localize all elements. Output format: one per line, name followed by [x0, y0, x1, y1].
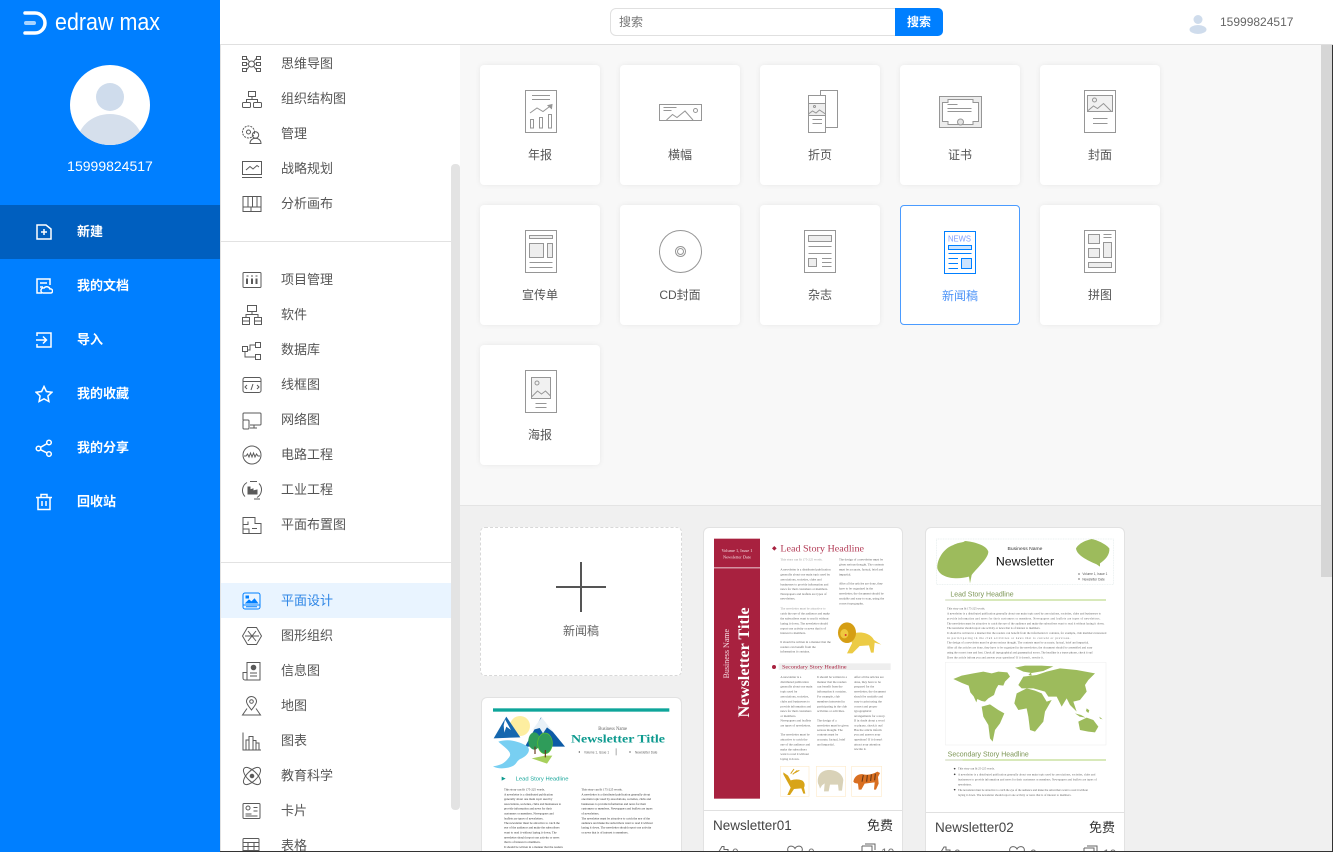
lead story: businesses to provide information and news for their: [581, 802, 646, 806]
search input: [610, 8, 900, 36]
lead story: Newspapers and leaflets are types of: [780, 592, 827, 596]
lead story: The design of a newsletter must be given serious thought. The contents must be accurate, factual, brief and impartial.: [947, 641, 1089, 645]
secondary story: members interested in: [817, 699, 845, 703]
category: 平面设计 (selected): 平面设计: [281, 593, 333, 608]
lead story: correct typography.: [839, 601, 864, 605]
lion illustration: [838, 622, 881, 653]
lead story: After all the articles are done, they: [839, 582, 883, 587]
category: 电路工程: 电路工程: [281, 447, 333, 462]
category: 组织结构图: [242, 91, 346, 108]
masthead: Newsletter Date: [1082, 577, 1105, 581]
secondary story: attractive to catch the: [780, 738, 808, 742]
category: 教育科学: [242, 766, 333, 786]
lead story: A newsletter is a distributed publication generally about one main topic used by associations, societies, clubs and businesses to: [947, 611, 1102, 615]
secondary story: For example, club: [817, 695, 840, 700]
secondary story: Has the article inform: [854, 728, 882, 732]
lead story: This story can fit 175-225 words.: [947, 606, 985, 610]
lead story: generally about one main topic used by: [780, 573, 830, 577]
type card: 新闻稿 (selected): NEWS: [948, 234, 971, 244]
category: 电路工程: [242, 446, 333, 464]
lead story: It should be written in a manner that the readers: [504, 845, 564, 849]
nav item: 我的收藏: [35, 385, 129, 403]
category: 网络图: 网络图: [281, 412, 320, 427]
world map: [945, 662, 1106, 745]
type card: 折页: [760, 65, 880, 185]
secondary story: The design of a: [817, 719, 837, 723]
type card: 证书: [900, 65, 1020, 185]
lead story: This story can fit 175-225 words.: [504, 788, 545, 792]
teal banner line: [493, 708, 669, 712]
secondary story: attract your attention: [854, 742, 881, 746]
template type panel: [460, 45, 1333, 505]
secondary story: manner that the readers: [817, 680, 847, 684]
secondary story: newsletter must be given: [817, 723, 849, 727]
secondary story: The newsletter must be: [780, 733, 810, 737]
secondary story: associations, societies,: [780, 695, 809, 700]
secondary story: The newsletter must be attractive to catch the eye of the audience and make the subscribers want to read it without: [958, 788, 1088, 792]
type card: 折页: 折页: [808, 148, 832, 162]
category: 软件: 软件: [281, 307, 307, 322]
nav item: 我的文档: 我的文档: [77, 278, 129, 293]
masthead: Business Name: [1008, 546, 1043, 552]
lead story: A newsletter is a distributed publication generally about: [581, 792, 650, 796]
secondary story: easy to print using the: [854, 699, 882, 703]
template card: Newsletter03: [481, 697, 682, 852]
nav item: 我的分享: [36, 440, 129, 457]
masthead: [936, 539, 1114, 584]
lead story: [502, 777, 653, 849]
newsletter03 thumbnail: [493, 708, 670, 849]
lead story: using the correct tone and font. Check all typographical and grammatical errors. The headline is a teaser phrase, check it out!: [947, 651, 1093, 655]
red title band: Newsletter Date: [723, 555, 751, 560]
category: 表格: [242, 838, 307, 852]
category: 工业工程: [242, 481, 333, 500]
secondary story: make the subscribers: [780, 747, 808, 751]
category: 教育科学: 教育科学: [281, 768, 333, 783]
category: 战略规划: 战略规划: [281, 161, 333, 176]
window bottom edge: [220, 851, 1333, 852]
lead story: The newsletter must be attractive to catch the eye of the: [581, 816, 651, 820]
newsletter02 price: 免费: [1089, 820, 1115, 835]
type card: CD封面: [620, 205, 740, 325]
nav item: 回收站: [36, 494, 116, 510]
category: 信息图: 信息图: [281, 663, 320, 678]
category: 战略规划: [242, 161, 333, 178]
secondary story: done, they have to be: [854, 680, 882, 685]
type card: 拼图: 拼图: [1088, 288, 1112, 302]
lead story: businesses to provide information and: [780, 582, 829, 586]
secondary story: activities or activities.: [817, 709, 845, 713]
type card: 封面: 封面: [1088, 148, 1112, 162]
secondary story: laying it down.: [780, 757, 800, 761]
landscape illustration: [493, 716, 565, 768]
secondary story: This story can fit 25-225 words.: [958, 767, 995, 771]
type card: 封面: [1040, 65, 1160, 185]
lead story: eye of the audience and make the subscribers: [504, 826, 560, 830]
red title band: Volume 1, Issue 1: [722, 548, 752, 554]
lead story: news for their customers or members.: [780, 587, 828, 591]
masthead: Volume 1, Issue 1: [584, 750, 609, 754]
secondary story: you and answer your: [854, 733, 881, 737]
secondary story: businesses to provide information and news for their customers or members. Newspapers and leaflets are types of: [958, 778, 1097, 782]
secondary story: can benefit from the: [817, 685, 843, 689]
lead story: The newsletter must be attractive to: [780, 606, 826, 610]
secondary story: newsletter; the document: [854, 690, 886, 694]
secondary story: [945, 752, 1106, 797]
newsletter01 name: Newsletter01: [713, 818, 792, 833]
type card: 宣传单: 宣传单: [522, 288, 558, 302]
secondary story: questions? If it doesn't: [854, 738, 882, 742]
secondary story: topic used by: [780, 690, 798, 694]
masthead: Volume 1, Issue 1: [1082, 572, 1108, 576]
user avatar: [70, 65, 150, 145]
type card: 杂志: [760, 205, 880, 325]
lead story: A newsletter is a distributed publication: [504, 792, 553, 796]
blank card label: 新闻稿: [563, 624, 599, 638]
top header bar: [220, 0, 1333, 45]
category: 思维导图: 思维导图: [281, 56, 333, 71]
secondary story: or phrase, check it out!: [854, 723, 883, 728]
red title band: [714, 539, 760, 799]
lead story: catch the eye of the audience and make: [780, 611, 830, 615]
masthead: [571, 727, 665, 755]
lead story: of newsletters.: [581, 811, 600, 815]
type card: 新闻稿 (selected): 新闻稿: [942, 289, 978, 303]
category: 线框图: [242, 377, 320, 393]
secondary story: information it contains.: [817, 690, 847, 694]
secondary story: If in doubt about a word: [854, 719, 885, 723]
lead story: report one activity or news that is of: [780, 626, 827, 630]
lead story: information it contains.: [780, 650, 810, 654]
secondary story: Secondary Story Headline: [948, 752, 1029, 759]
secondary story: should be readable and: [854, 695, 883, 699]
category: 网络图: [242, 412, 320, 430]
type card: 海报: [480, 345, 600, 465]
search input: 搜索: [619, 15, 643, 29]
category: 地图: [242, 696, 307, 716]
secondary story: or members.: [780, 714, 796, 718]
secondary story: laying it down. The newsletter should report one activity or news that is of interest to members.: [958, 793, 1072, 797]
category: 地图: 地图: [281, 698, 307, 713]
lead story: After all the articles are done, they have to be organized in the newsletter; the document should be assembled and easy: [947, 646, 1093, 650]
lead story: [772, 544, 885, 654]
lead story: [945, 591, 1107, 659]
secondary story: arrangements for a story.: [854, 714, 886, 718]
nav item: 新建 (active): [0, 205, 220, 259]
lead story: associations, societies, clubs and businesses to: [504, 802, 562, 807]
secondary story: contents must be: [817, 733, 839, 737]
category: 图表: [242, 732, 307, 750]
lead story: leaflets are types of newsletters.: [504, 816, 544, 820]
lead story: want to read it without laying it down. The: [504, 831, 557, 835]
type card: 证书: 证书: [948, 148, 972, 162]
category: 分析画布: [242, 196, 333, 212]
page scrollbar: [1321, 45, 1333, 577]
secondary story: It should be written in a: [817, 675, 848, 679]
lead story: the subscribers want to read it without: [780, 616, 829, 620]
secondary story: are types of newsletters.: [780, 723, 811, 727]
template list panel: [460, 505, 1333, 852]
lead story: interest to members.: [780, 631, 806, 635]
secondary story: distributed publication: [780, 680, 809, 684]
user icon: [1190, 15, 1206, 34]
lead story: It should be written in a manner that the readers can benefit from the information it contains, for example, club members interested: [947, 631, 1107, 635]
newsletter01 stats: [718, 844, 894, 852]
category: 线框图: 线框图: [281, 377, 320, 392]
lead story: have to be organized in the: [839, 586, 874, 590]
lead story: The newsletter must be attractive to catch the eye of the audience and make the subscribers want to read it without laying it down.: [947, 621, 1105, 625]
lead story: in participating in the club activities or news that is current or previous.: [947, 636, 1071, 640]
category panel: [220, 45, 460, 852]
newsletter02 name: Newsletter02: [935, 820, 1014, 835]
lead story: Lead Story Headline: [780, 544, 864, 555]
secondary story: generally about one main: [780, 685, 813, 689]
type card: 年报: 年报: [528, 148, 552, 162]
secondary story: clubs and businesses to: [780, 699, 810, 703]
newsletter01 price: 免费: [867, 818, 893, 833]
lead story: It should be written in a manner that the: [780, 640, 831, 644]
secondary story: participating in the club: [817, 704, 847, 708]
category: 项目管理: 项目管理: [281, 272, 333, 287]
plus icon: [556, 562, 606, 612]
type card: 海报: 海报: [528, 428, 552, 442]
lead story: newsletter; the document should be: [839, 591, 884, 595]
lead story: readable and easy to scan, using the: [839, 596, 885, 601]
category: 数据库: [242, 342, 320, 360]
lead story: newsletter should report one activity or news: [504, 835, 560, 839]
lead story: customers or members. Newspapers and leaflets are types: [581, 807, 653, 811]
nav item: 我的收藏: 我的收藏: [77, 386, 129, 401]
lead story: associations, societies, clubs and: [780, 577, 822, 582]
lead story: generally about one main topic used by: [504, 797, 553, 801]
secondary story: A newsletter is a distributed publication generally about one main topic used by associations, societies, clubs and: [958, 773, 1096, 777]
secondary story: After all the articles are: [854, 675, 884, 679]
category: 卡片: 卡片: [281, 803, 307, 818]
red title band: Newsletter Title: [736, 607, 753, 717]
category: 图形组织: 图形组织: [281, 628, 333, 643]
lead story: provide information and news for their customers or members. Newspapers and leaflets are types of newsletters.: [947, 616, 1101, 620]
lead story: Does the article inform you and answer your questions? If it doesn't, rewrite it.: [947, 655, 1044, 659]
category: 管理: [242, 126, 307, 144]
category: 软件: [242, 305, 307, 325]
category: 信息图: [242, 662, 320, 680]
category: 图表: 图表: [281, 733, 307, 748]
secondary story: want to read it without: [780, 752, 809, 756]
secondary story: correct and proper: [854, 704, 878, 708]
nav item: 我的分享: 我的分享: [77, 440, 129, 455]
animal pictures: [780, 766, 882, 796]
lead story: Lead Story Headline: [516, 777, 568, 783]
category: 思维导图: [242, 56, 333, 72]
category: 卡片: [242, 803, 307, 819]
nav item: 回收站: 回收站: [77, 494, 116, 509]
nav item: 导入: 导入: [77, 332, 103, 347]
category: 数据库: 数据库: [281, 342, 320, 357]
secondary story: rewrite it.: [854, 747, 866, 751]
lead story: provide information and news for their: [504, 807, 552, 811]
lead story: This story can fit 175-225 words.: [780, 558, 823, 562]
lead story: laying it down. The newsletter should: [780, 621, 828, 625]
category: 分析画布: 分析画布: [281, 196, 333, 211]
lead story: or news that is of interest to members.: [581, 831, 629, 835]
new blank template card: [480, 527, 682, 676]
type card: 新闻稿 (selected): [900, 205, 1020, 325]
newsletter01 thumbnail: [714, 538, 890, 799]
window right edge: [1332, 45, 1333, 852]
lead story: that is of interest to members.: [504, 840, 541, 844]
lead story: The newsletter should report one activity or news that is of interest to members.: [947, 626, 1041, 630]
category: 组织结构图: 组织结构图: [281, 91, 346, 106]
secondary story: serious thought. The: [817, 728, 843, 732]
masthead: Newsletter: [996, 554, 1054, 568]
lead story: readers can benefit from the: [780, 645, 816, 649]
logo: edraw max: [55, 9, 160, 36]
secondary story: Newspapers and leaflets: [780, 719, 812, 723]
secondary story: provide information and: [780, 704, 811, 708]
category: 管理: 管理: [281, 126, 307, 141]
category: 平面布置图: [242, 517, 346, 534]
secondary story: typographical: [854, 709, 871, 713]
category: 平面设计 (selected): [221, 583, 451, 618]
type card: CD封面: CD封面: [659, 288, 701, 302]
type card: 年报: [480, 65, 600, 185]
template card: Newsletter01: [703, 527, 903, 852]
nav item: 新建 (active): 新建: [77, 224, 103, 239]
type card: 横幅: 横幅: [668, 148, 692, 162]
user name: 15999824517: [1220, 15, 1293, 29]
masthead: Business Name: [598, 727, 627, 732]
lead story: one main topic used by associations, societies, clubs and: [581, 797, 651, 802]
search button: [895, 8, 943, 36]
search button: 搜索: [907, 15, 931, 29]
nav item: 导入: [36, 332, 103, 348]
secondary story: eye of the audience and: [780, 742, 811, 746]
type card: 横幅: [620, 65, 740, 185]
secondary story: A newsletter is a: [780, 675, 802, 679]
sidebar panel: [0, 0, 220, 852]
lead story: This story can fit 175-225 words.: [581, 788, 623, 792]
secondary story: and impartial.: [817, 742, 835, 746]
lead story: audience and make the subscribers want to read it without: [581, 821, 653, 825]
lead story: The design of a newsletter must be: [839, 558, 884, 562]
category: 项目管理: [242, 272, 333, 288]
secondary story: [772, 663, 891, 761]
type card: 宣传单: [480, 205, 600, 325]
user phone number: 15999824517: [67, 158, 153, 174]
category: 图形组织: [242, 627, 333, 645]
newsletter02 stats: [941, 846, 1116, 852]
red title band: Business Name: [722, 628, 731, 678]
secondary story: newsletters.: [958, 782, 972, 786]
masthead: Newsletter Date: [635, 750, 658, 754]
secondary story: Secondary Story Headline: [782, 665, 847, 671]
lead story: The newsletter must be attractive to catch the: [504, 821, 560, 825]
template card: Newsletter02: [925, 527, 1125, 852]
lead story: must be accurate, factual, brief and: [839, 567, 884, 572]
lead story: laying it down. The newsletter should report one activity: [581, 826, 652, 830]
lead story: customers or members. Newspapers and: [504, 811, 554, 815]
lead story: A newsletter is a distributed publication: [780, 568, 831, 572]
secondary story: accurate, factual, brief: [817, 738, 846, 743]
secondary story: news for their customers: [780, 709, 812, 713]
category scrollbar: [451, 164, 460, 810]
nav item: 我的文档: [36, 278, 129, 294]
secondary story: prepared for the: [854, 685, 875, 689]
type card: 杂志: 杂志: [808, 288, 832, 302]
type card: 拼图: [1040, 205, 1160, 325]
newsletter02 thumbnail: [936, 538, 1114, 797]
lead story: given serious thought. The contents: [839, 563, 885, 567]
category: 平面布置图: 平面布置图: [281, 517, 346, 532]
lead story: newsletters.: [780, 597, 796, 601]
lead story: Lead Story Headline: [950, 591, 1014, 598]
category: 工业工程: 工业工程: [281, 482, 333, 497]
lead story: impartial.: [839, 572, 851, 576]
masthead: Newsletter Title: [571, 733, 665, 746]
